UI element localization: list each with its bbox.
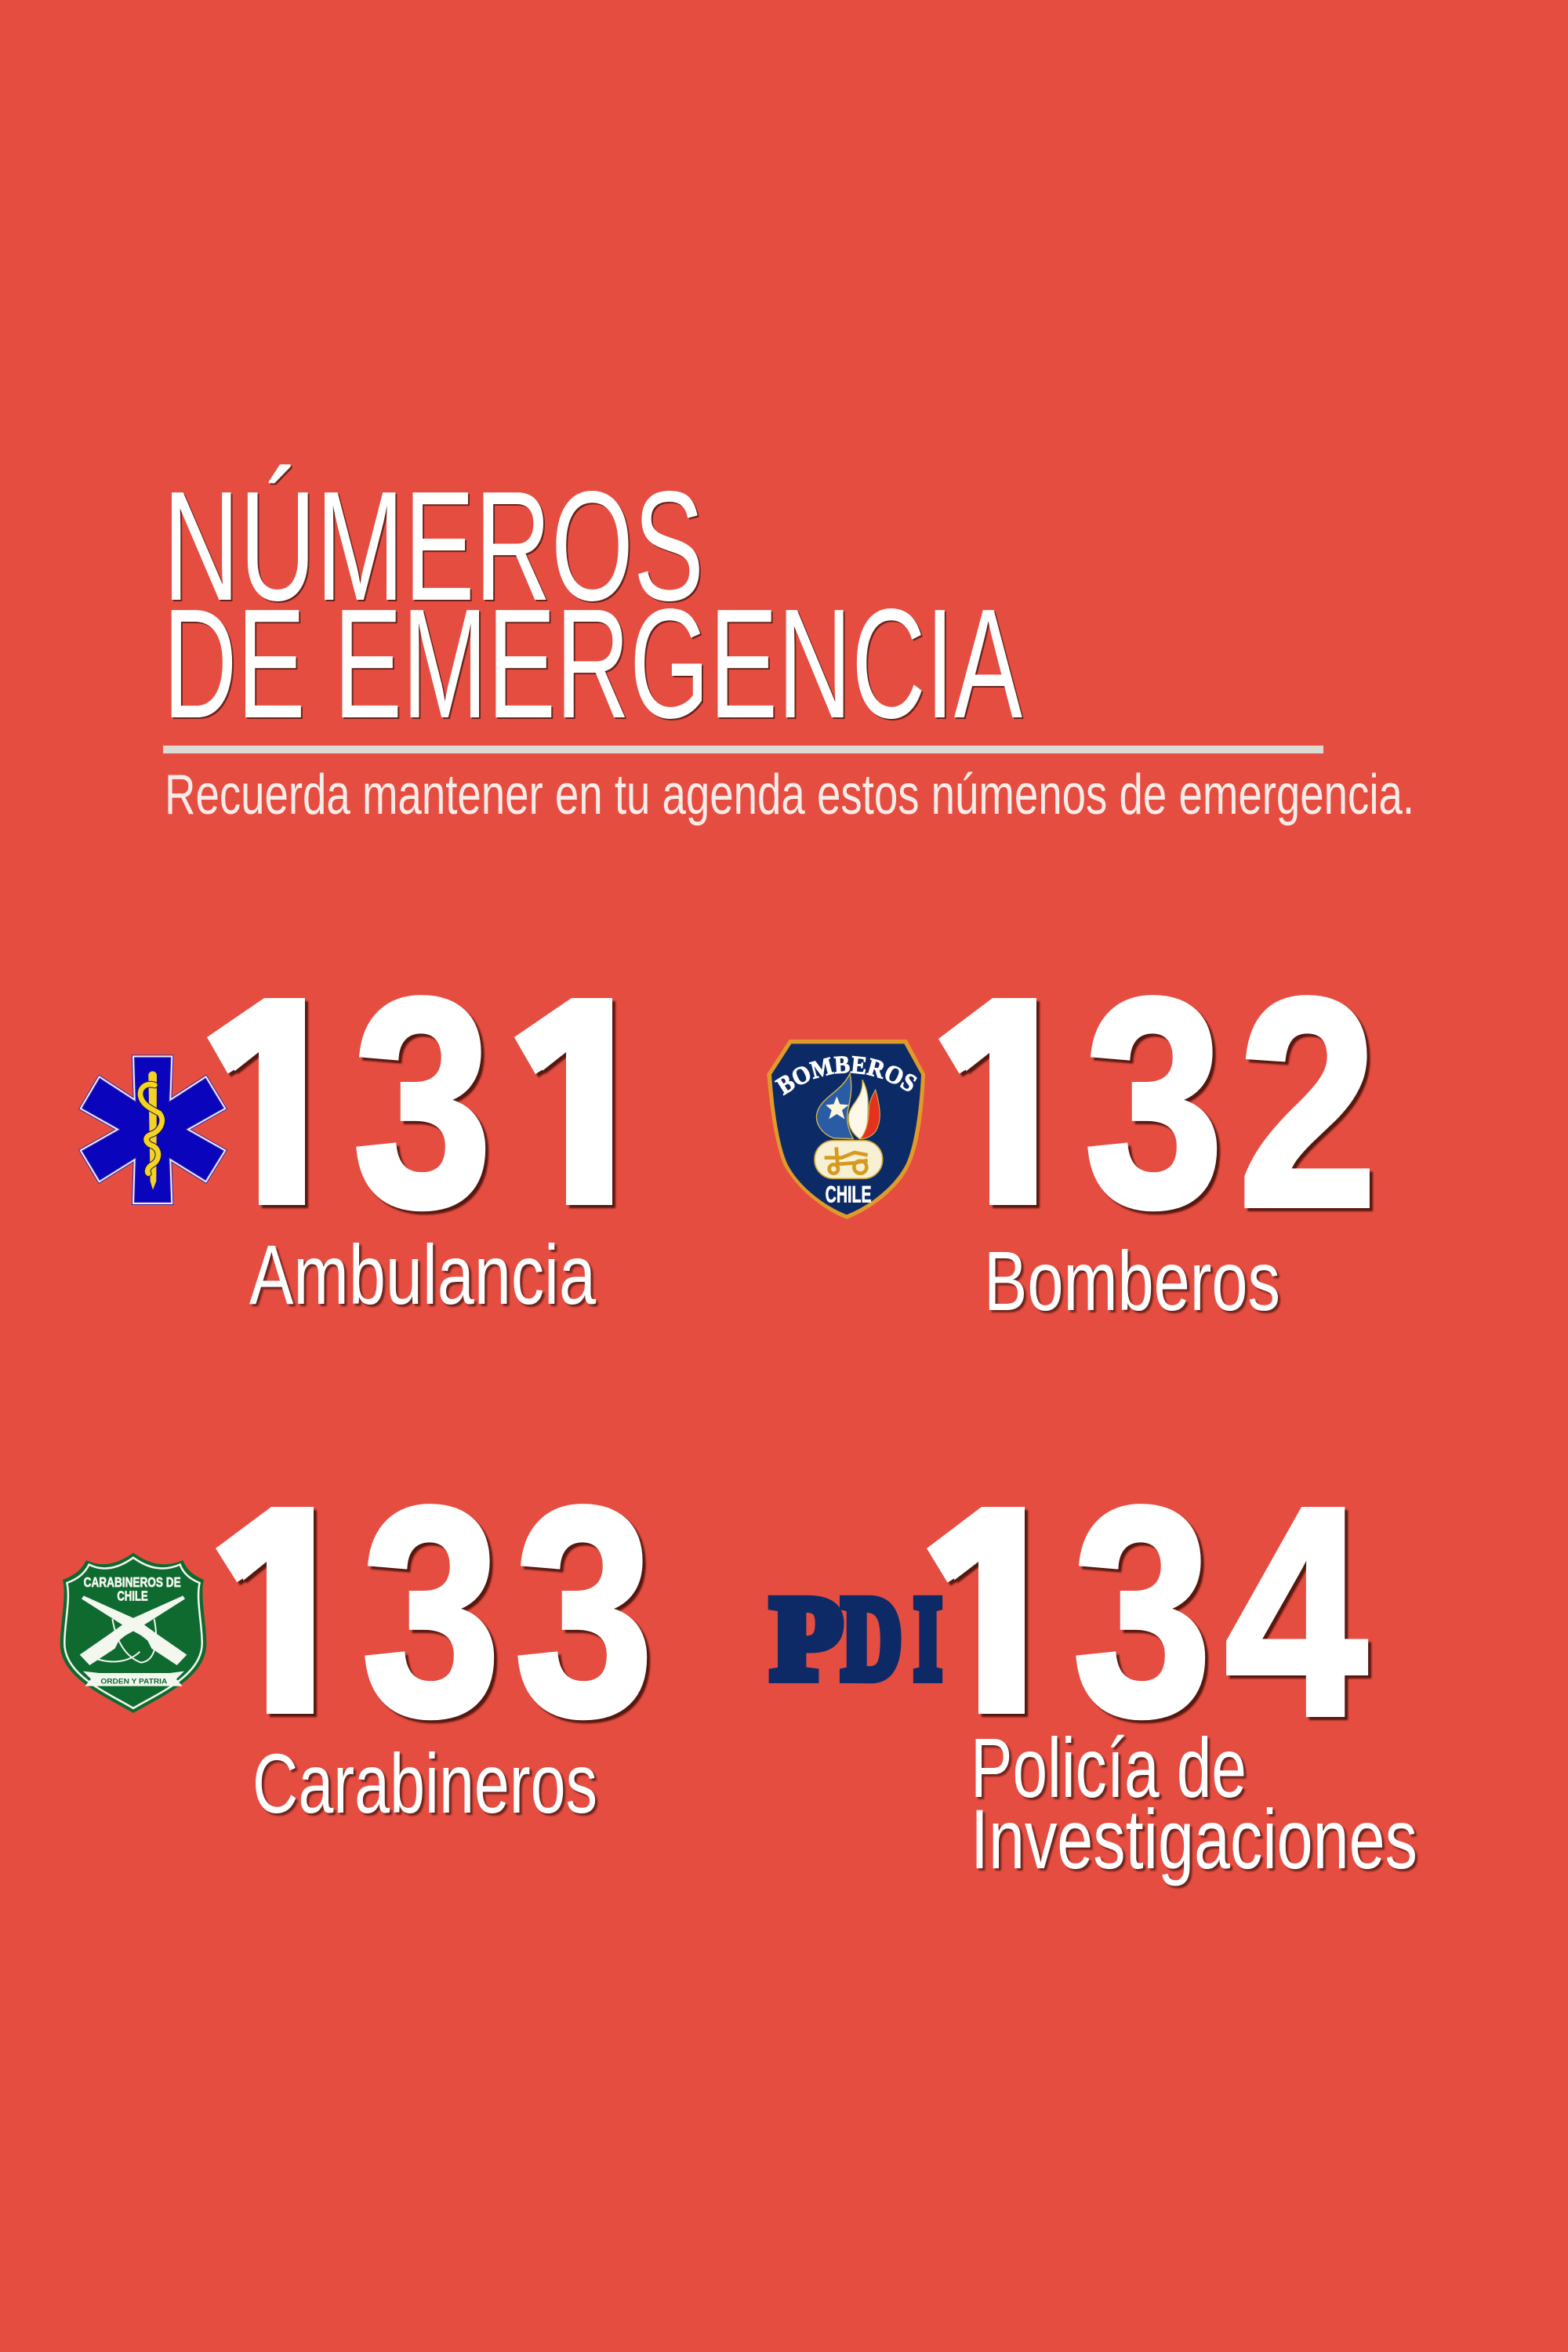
number 134: 4 (1225, 1446, 1368, 1777)
icon: PDI logo: I (914, 1573, 942, 1704)
number 131 (207, 995, 616, 1216)
number 134: 3 (1073, 1446, 1211, 1777)
title: DE EMERGENCIA (163, 577, 1022, 751)
icon: carabineros shield: CHILE (117, 1588, 148, 1604)
icon: bomberos shield: CHILE (826, 1181, 872, 1207)
number 131: 1 (492, 938, 657, 1269)
icon: PDI logo: D (842, 1574, 902, 1704)
number 133: 3 (515, 1446, 653, 1777)
label: Policía de Investigaciones: Policía de (971, 1720, 1247, 1815)
title: NÚMEROS (163, 459, 704, 633)
title (163, 459, 1022, 751)
icon: PDI logo: P (771, 1574, 842, 1704)
number 132: 1 (916, 938, 1080, 1269)
number 131: 1 (184, 938, 349, 1269)
icon: bomberos shield: BOMBEROS (775, 1055, 917, 1096)
number 133: 1 (193, 1446, 358, 1777)
number 134 (927, 1504, 1373, 1725)
number 133 (216, 1504, 652, 1725)
label: Bomberos: Bomberos (984, 1233, 1280, 1328)
number 133: 3 (362, 1446, 500, 1777)
number 132: 3 (1085, 937, 1223, 1268)
label: Policía de Investigaciones (971, 1720, 1417, 1886)
icon: star of life (81, 1056, 225, 1203)
number 132 (938, 995, 1374, 1216)
label: Policía de Investigaciones: Investigaciones (971, 1791, 1417, 1886)
label: Ambulancia: Ambulancia (249, 1227, 597, 1322)
label: Carabineros: Carabineros (252, 1736, 597, 1831)
number 131: 3 (354, 937, 492, 1268)
number 132: 2 (1239, 937, 1377, 1268)
icon: carabineros shield: CARABINEROS DE (84, 1574, 181, 1590)
icon: PDI logo (771, 1573, 942, 1704)
number 134: 1 (904, 1446, 1069, 1777)
icon: carabineros shield (60, 1553, 206, 1713)
icon: bomberos shield (767, 1040, 925, 1219)
icon: carabineros shield: ORDEN Y PATRIA (100, 1678, 168, 1686)
